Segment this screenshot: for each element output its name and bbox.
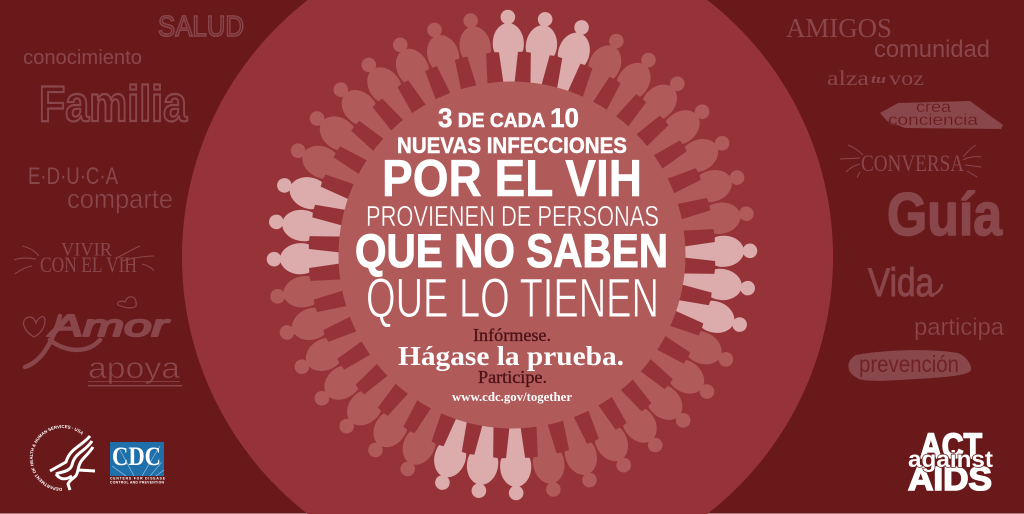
word: alza tu voz: tu bbox=[871, 71, 886, 86]
word: Guía: Guía bbox=[887, 181, 1003, 248]
word: CONVERSA with rays: CONVERSA bbox=[861, 151, 964, 176]
headline line: que lo tienen: QUE LO TIENEN bbox=[366, 266, 659, 329]
word: Amor with hearts: Amor bbox=[47, 308, 171, 343]
logo: CDC: CENTERS FOR DISEASE bbox=[110, 476, 166, 480]
word: crea conciencia on brush stroke bbox=[880, 99, 1003, 129]
inner circle bbox=[338, 82, 686, 428]
logo: CDC: CONTROL AND PREVENTION bbox=[110, 480, 165, 484]
headline line: 3 de cada 10: 3 DE CADA 10 bbox=[438, 103, 579, 133]
logo word: against: against bbox=[908, 446, 993, 472]
large central circle bbox=[182, 0, 833, 514]
text: Participe: Participe. bbox=[478, 367, 547, 387]
word: crea conciencia on brush stroke: conciencia bbox=[888, 112, 978, 129]
word: crea conciencia on brush stroke: crea bbox=[916, 99, 951, 116]
word: prevención on brush stroke: prevención bbox=[859, 351, 959, 377]
word: alza tu voz bbox=[827, 66, 924, 90]
word: vivir con el VIH bbox=[14, 240, 154, 277]
logo word: AIDS: AIDS bbox=[908, 460, 992, 497]
ring of people figures bbox=[266, 9, 758, 501]
word: conocimiento: conocimiento bbox=[23, 47, 142, 69]
word: comunidad: comunidad bbox=[874, 36, 990, 63]
word: comparte: comparte bbox=[67, 184, 173, 214]
word: vivir con el VIH: CON EL VIH bbox=[40, 252, 137, 277]
highlighted figures: 3 of every 10 bbox=[266, 9, 758, 501]
logo: HHS eagle seal: DEPARTMENT OF HEALTH & HUMAN SERVICES · USA bbox=[30, 425, 83, 491]
text: Infórmese: Infórmese. bbox=[473, 325, 551, 345]
headline bbox=[355, 103, 668, 329]
logo word: ACT: ACT bbox=[920, 427, 982, 466]
word: CONVERSA with rays bbox=[840, 145, 981, 178]
headline line: que no saben: QUE NO SABEN bbox=[355, 225, 668, 278]
text: Hágase la prueba: Hágase la prueba. bbox=[398, 341, 624, 371]
word: EDUCA: E·D·U·C·A bbox=[28, 163, 118, 190]
word: alza tu voz: voz bbox=[889, 66, 924, 90]
logo: CDC bbox=[110, 442, 166, 484]
headline line: provienen de personas: PROVIENEN DE PERSONAS bbox=[366, 201, 659, 233]
faint words right column bbox=[786, 13, 1005, 381]
faint words left column bbox=[14, 11, 244, 386]
word: apoya with underline: apoya bbox=[88, 352, 180, 385]
regular figures bbox=[268, 11, 756, 499]
word: SALUD: SALUD bbox=[158, 11, 244, 43]
word: Amor with hearts bbox=[24, 297, 171, 367]
word: Familia: Familia bbox=[39, 76, 188, 132]
headline line: por el VIH: POR EL VIH bbox=[382, 150, 642, 208]
word: alza tu voz: alza bbox=[827, 66, 870, 90]
headline line: nuevas infecciones: NUEVAS INFECCIONES bbox=[397, 133, 627, 158]
call to action bbox=[398, 325, 624, 404]
logo: CDC: CDC bbox=[112, 442, 161, 471]
word: Vida: Vida bbox=[868, 261, 935, 305]
logo: Act Against AIDS bbox=[908, 427, 993, 497]
word: participa: participa bbox=[914, 314, 1005, 341]
text: website url: www.cdc.gov/together bbox=[452, 390, 572, 404]
word: vivir con el VIH: VIVIR bbox=[61, 240, 113, 260]
word: AMIGOS: AMIGOS bbox=[786, 13, 892, 43]
